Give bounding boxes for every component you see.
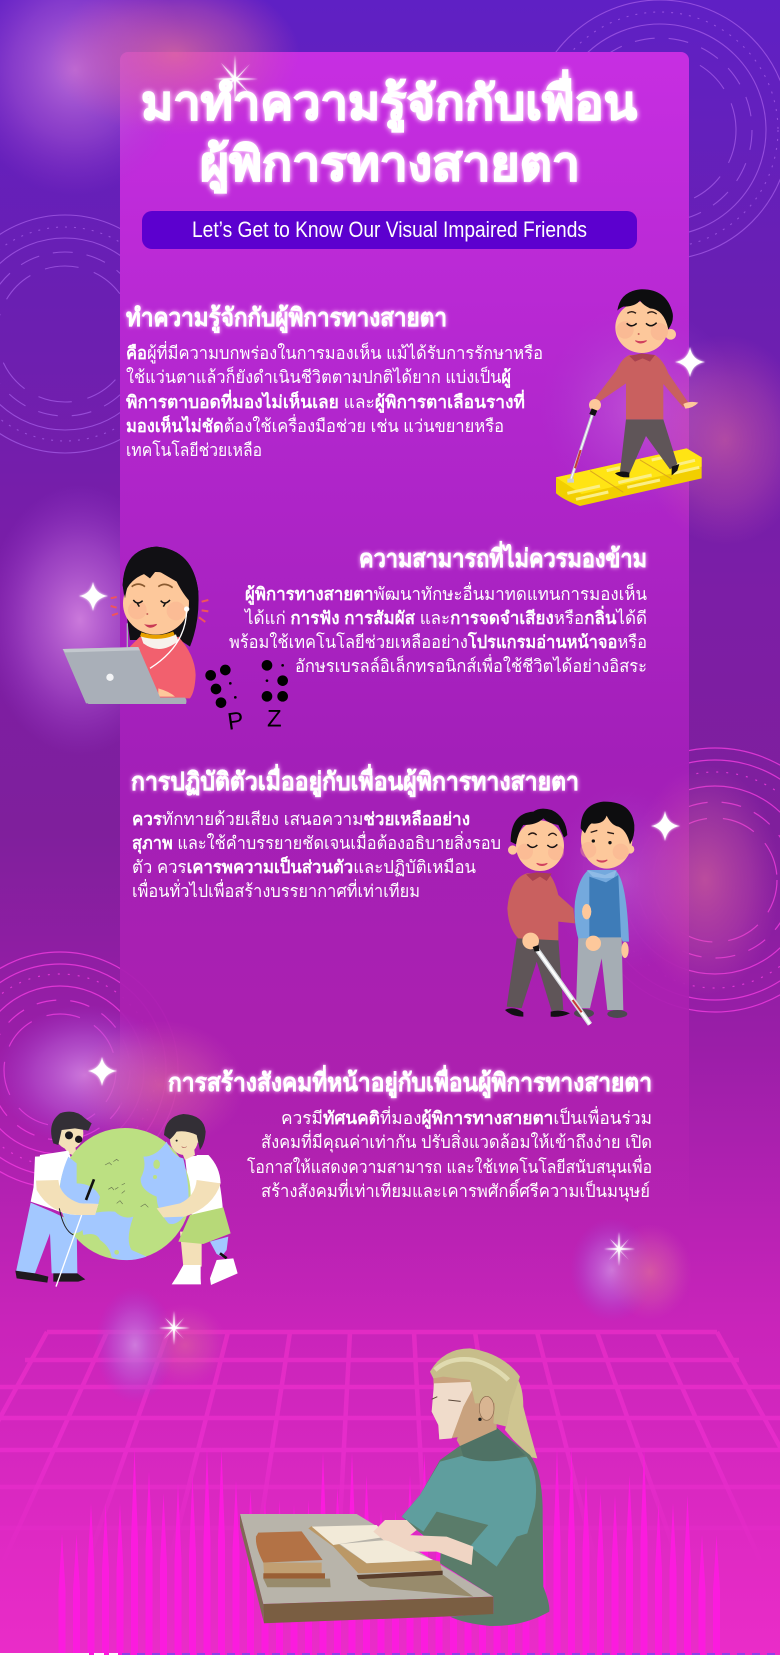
section 4 body xyxy=(247,1106,652,1202)
section 1 body: พิการตาบอดที่มองไม่เห็นเลย และผู้พิการตาเลือนรางที่ xyxy=(126,389,525,414)
sparkle: section 4 xyxy=(88,1057,117,1086)
sparkle: section 2 xyxy=(79,582,108,611)
decorative rings: right pink xyxy=(583,748,780,1012)
section 4 heading: การสร้างสังคมที่หน้าอยู่กับเพื่อนผู้พิการทางสายตา xyxy=(168,1065,652,1099)
subtitle pill: Let’s Get to Know Our Visual Impaired Friends xyxy=(192,217,587,242)
section 3 heading: การปฏิบัติตัวเมื่ออยู่กับเพื่อนผู้พิการทางสายตา xyxy=(131,764,579,798)
section 1 body xyxy=(126,341,543,460)
sparkle burst: right xyxy=(604,1232,635,1266)
decorative rings: left xyxy=(0,215,184,453)
braille letters P and Z xyxy=(205,660,288,736)
glow blob behind panel: section 2 left xyxy=(0,485,175,755)
braille letters P and Z: Z xyxy=(267,705,282,732)
illustration: woman with laptop and earphones xyxy=(63,547,208,704)
section 2 body: พร้อมใช้เทคโนโลยีช่วยเหลืออย่างโปรแกรมอ่านหน้าจอหรือ xyxy=(229,631,647,652)
section 1 heading: ทำความรู้จักกับผู้พิการทางสายตา xyxy=(126,304,447,334)
section 2 heading: ความสามารถที่ไม่ควรมองข้าม xyxy=(359,541,647,573)
section 2 body: อักษรเบรลล์อิเล็กทรอนิกส์เพื่อใช้ชีวิตได้อย่างอิสระ xyxy=(295,654,647,676)
main title: ผู้พิการทางสายตา xyxy=(200,137,580,194)
section 2: text xyxy=(229,541,647,676)
content panel xyxy=(120,52,689,1342)
section 1: text xyxy=(126,304,543,460)
sound wave spikes xyxy=(58,1448,720,1655)
illustration: man walking on tactile paving with cane xyxy=(556,289,702,506)
section 3 body xyxy=(132,809,501,901)
section 1 body: เทคโนโลยีช่วยเหลือ xyxy=(126,440,262,460)
section 3 body: สุภาพ และใช้คำบรรยายชัดเจนเมื่อต้องอธิบายสิ่งรอบ xyxy=(132,831,501,854)
section 1 body: ใช้แว่นตาแล้วก็ยังดำเนินชีวิตตามปกติได้ยาก แบ่งเป็นผู้ xyxy=(126,366,511,389)
main title xyxy=(141,69,637,194)
section 4: text xyxy=(168,1065,652,1202)
subtitle pill xyxy=(142,211,637,249)
section 2 body: ผู้พิการทางสายตาพัฒนาทักษะอื่นมาทดแทนการมองเห็น xyxy=(245,582,647,606)
section 3 body: ควรทักทายด้วยเสียง เสนอความช่วยเหลืออย่าง xyxy=(132,809,470,829)
section 3 body: เพื่อนทั่วไปเพื่อสร้างบรรยากาศที่เท่าเทียม xyxy=(132,879,420,901)
main title: มาทำความรู้จักกับเพื่อน xyxy=(141,69,637,133)
section 4 body: ควรมีทัศนคติที่มองผู้พิการทางสายตาเป็นเพื่อนร่วม xyxy=(281,1106,652,1130)
section 4 body: สังคมที่มีคุณค่าเท่ากัน ปรับสิ่งแวดล้อมให้เข้าถึงง่าย เปิด xyxy=(261,1130,652,1153)
illustration: two friends walking, one with cane xyxy=(505,802,634,1024)
illustration: two people hugging the globe xyxy=(15,1112,238,1287)
sparkle burst on title xyxy=(213,55,258,103)
section 2 body xyxy=(229,582,647,676)
bottom edge strip xyxy=(0,1653,780,1655)
section 1 body: คือผู้ที่มีความบกพร่องในการมองเห็น แม้ได้รับการรักษาหรือ xyxy=(126,341,543,364)
decorative rings: lower left pink xyxy=(0,952,178,1188)
illustration: woman reading braille book at table xyxy=(240,1348,549,1626)
section 4 body: โอกาสให้แสดงความสามารถ และใช้เทคโนโลยีสนับสนุนเพื่อ xyxy=(247,1155,652,1178)
sparkle: section 3 xyxy=(651,811,680,841)
section 3: text xyxy=(131,764,579,901)
sparkle: section 1 xyxy=(675,347,705,377)
floor grid xyxy=(0,1332,780,1560)
section 3 body: ตัว ควรเคารพความเป็นส่วนตัวและปฏิบัติเหมือน xyxy=(132,855,476,877)
sparkle burst: left xyxy=(159,1311,190,1345)
section 4 body: สร้างสังคมที่เท่าเทียมและเคารพศักดิ์ศรีความเป็นมนุษย์ xyxy=(261,1178,650,1202)
section 2 body: ได้แก่ การฟัง การสัมผัส และการจดจำเสียงหรือกลิ่นได้ดี xyxy=(243,605,647,628)
decorative rings: top right xyxy=(530,0,780,260)
section 1 body: มองเห็นไม่ชัดต้องใช้เครื่องมือช่วย เช่น แว่นขยายหรือ xyxy=(126,414,504,436)
braille letters P and Z: P xyxy=(226,707,245,736)
